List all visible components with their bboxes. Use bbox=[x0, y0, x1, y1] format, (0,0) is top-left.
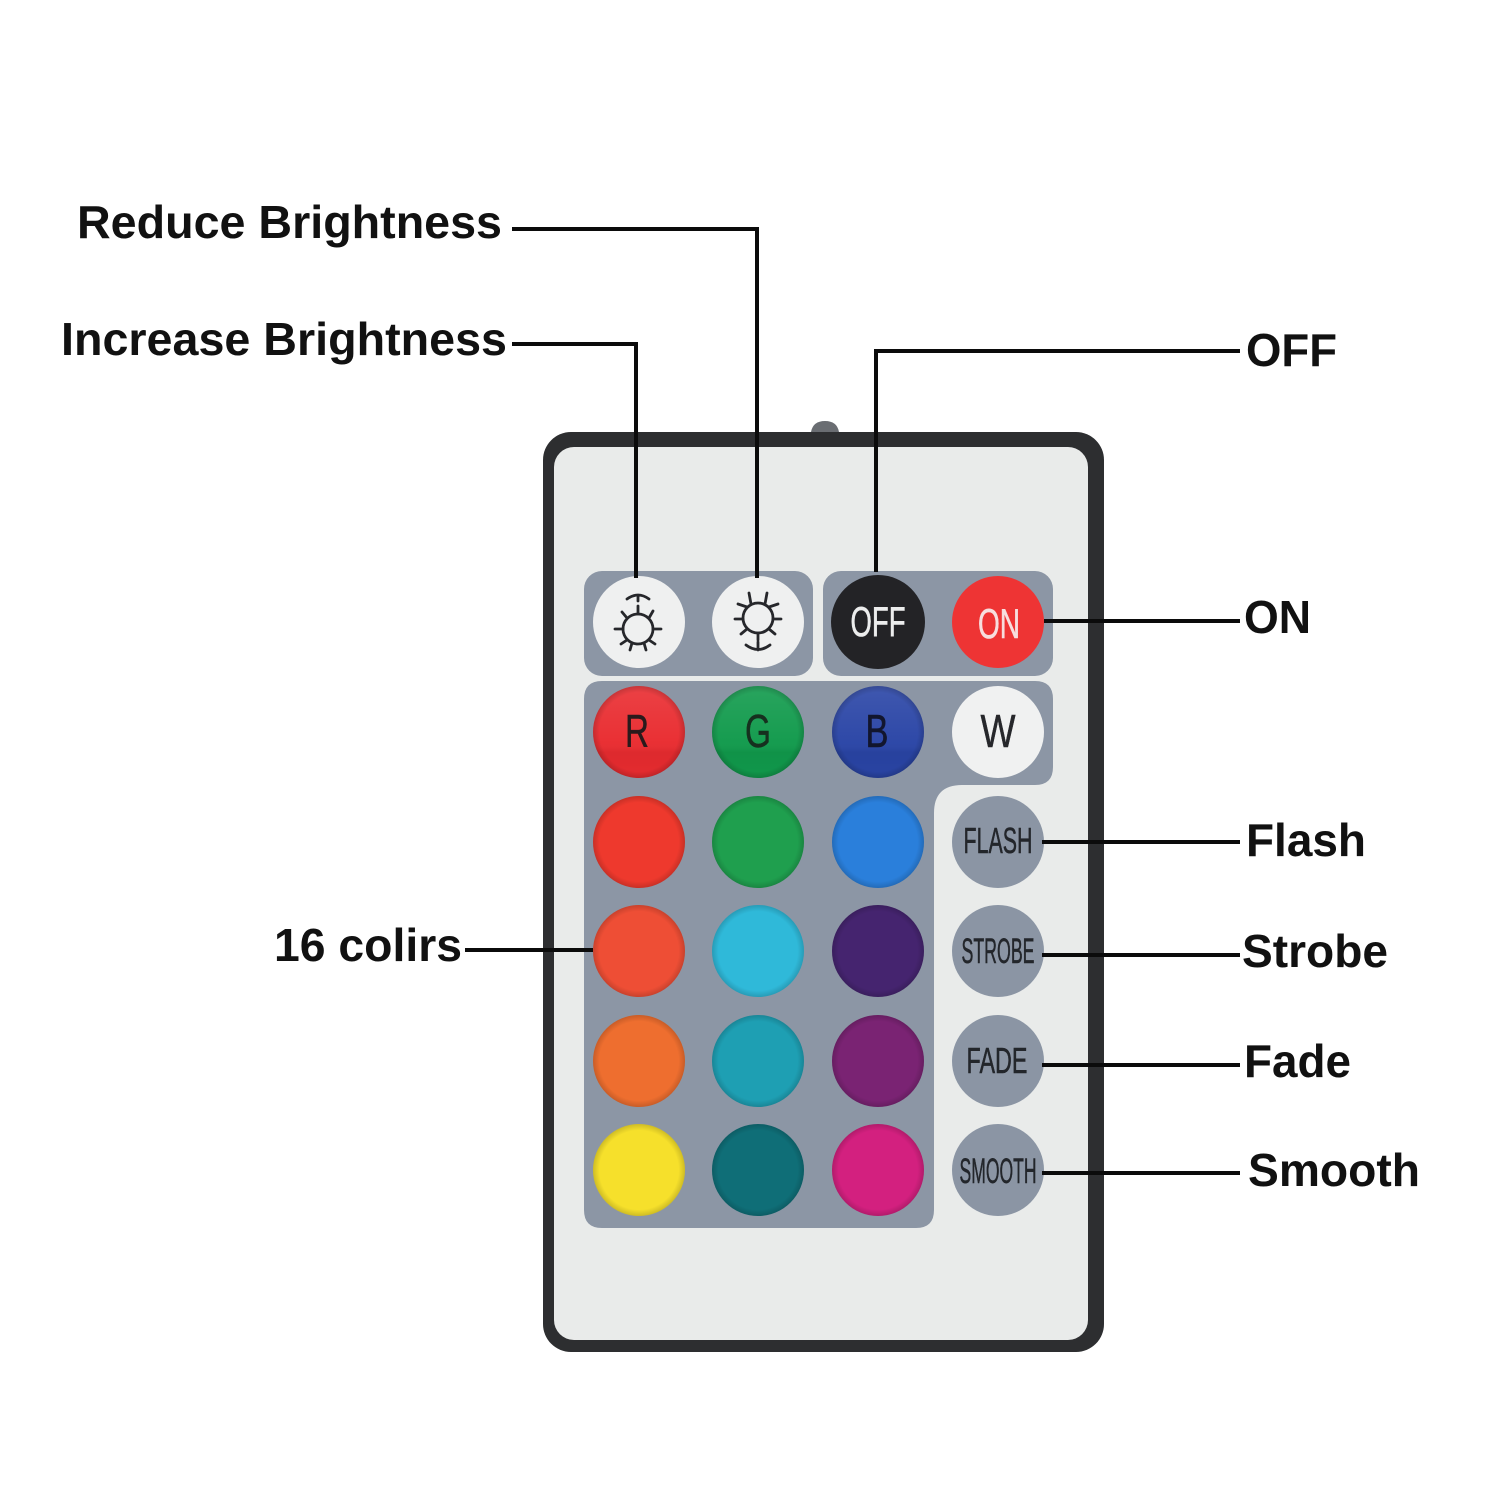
leader line: 16 colors bbox=[465, 948, 593, 952]
button: FLASH: FLASH bbox=[964, 820, 1032, 861]
button: G: G bbox=[745, 705, 771, 757]
button: B bbox=[832, 686, 924, 778]
label: Fade: Fade bbox=[1244, 1035, 1351, 1087]
leader line: Reduce Brightness bbox=[512, 229, 757, 578]
icon: sun with up arrow bbox=[615, 595, 661, 650]
label: OFF: OFF bbox=[1246, 324, 1337, 376]
panel: colour keys bbox=[584, 681, 1053, 1228]
button: SMOOTH bbox=[952, 1124, 1044, 1216]
label: Strobe: Strobe bbox=[1242, 925, 1388, 977]
label: Smooth: Smooth bbox=[1248, 1144, 1420, 1196]
IR emitter bump bbox=[811, 421, 839, 432]
label: ON: ON bbox=[1244, 591, 1311, 643]
leader line: ON bbox=[1044, 619, 1240, 623]
leader line: Smooth bbox=[1042, 1171, 1240, 1175]
leader line: Increase Brightness bbox=[512, 344, 636, 578]
button: W: W bbox=[980, 705, 1016, 757]
leader line: Fade bbox=[1042, 1063, 1240, 1067]
button: reduce brightness bbox=[712, 576, 804, 668]
button: B: B bbox=[866, 705, 888, 757]
button: FLASH bbox=[952, 796, 1044, 888]
panel: power keys bbox=[823, 571, 1053, 676]
button: OFF bbox=[831, 575, 925, 669]
button: FADE: FADE bbox=[966, 1040, 1028, 1081]
panel: brightness keys bbox=[584, 571, 813, 676]
icon: sun with down arrow bbox=[735, 593, 781, 650]
button: increase brightness bbox=[593, 576, 685, 668]
leader line: Flash bbox=[1042, 840, 1240, 844]
button: R: R bbox=[625, 705, 649, 757]
button: OFF: OFF bbox=[850, 598, 906, 645]
button: R bbox=[593, 686, 685, 778]
button: W bbox=[952, 686, 1044, 778]
button: SMOOTH: SMOOTH bbox=[960, 1152, 1036, 1191]
button: ON bbox=[952, 576, 1044, 668]
leader line: OFF bbox=[876, 351, 1240, 572]
label: Increase Brightness: Increase Brightness bbox=[61, 313, 507, 365]
button: FADE bbox=[952, 1015, 1044, 1107]
label: Reduce Brightness: Reduce Brightness bbox=[77, 196, 502, 248]
colour keys grid bbox=[593, 796, 924, 1216]
button: STROBE bbox=[952, 905, 1044, 997]
remote control bbox=[543, 421, 1104, 1352]
button: ON: ON bbox=[978, 600, 1020, 647]
button: STROBE: STROBE bbox=[962, 932, 1034, 971]
leader line: Strobe bbox=[1042, 953, 1240, 957]
button: G bbox=[712, 686, 804, 778]
label: Flash: Flash bbox=[1246, 814, 1366, 866]
remote face bbox=[554, 447, 1088, 1340]
label: 16 colirs: 16 colirs bbox=[274, 919, 462, 971]
remote casing bbox=[543, 432, 1104, 1352]
